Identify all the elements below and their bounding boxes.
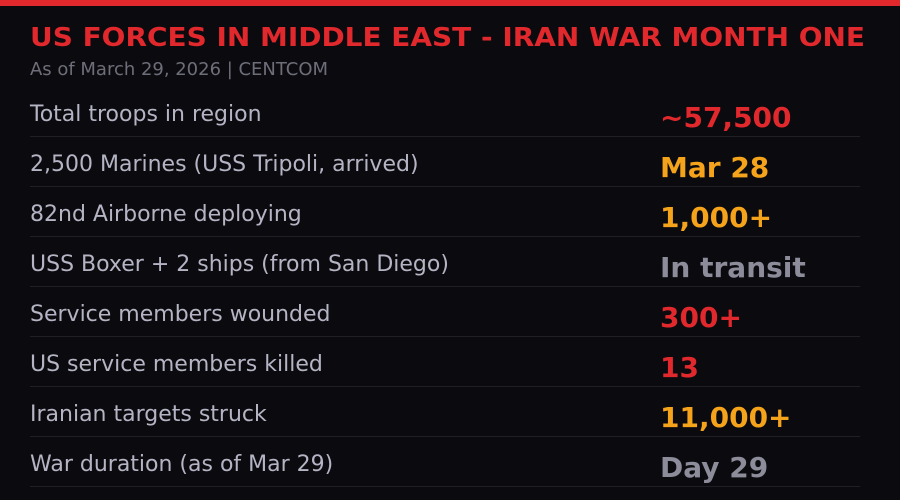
- stats table: 1,000+: [660, 201, 772, 234]
- stats table: [29, 101, 860, 486]
- top accent bar: [0, 0, 900, 6]
- stats table: Day 29: [660, 451, 768, 484]
- stats table: 13: [660, 351, 699, 384]
- stats table: Iranian targets struck: [30, 402, 267, 427]
- stats table: ~57,500: [660, 101, 792, 134]
- title: US FORCES IN MIDDLE EAST - IRAN WAR MONTH ONE: [30, 23, 865, 53]
- stats table: 2,500 Marines (USS Tripoli, arrived): [30, 152, 419, 177]
- stats table: War duration (as of Mar 29): [30, 452, 333, 477]
- stats table: 300+: [660, 301, 742, 334]
- stats table: Total troops in region: [29, 102, 262, 127]
- stats table: US service members killed: [30, 352, 323, 377]
- stats table: Mar 28: [660, 151, 769, 184]
- stats table: USS Boxer + 2 ships (from San Diego): [30, 252, 449, 277]
- stats table: In transit: [660, 251, 806, 284]
- subtitle: As of March 29, 2026 | CENTCOM: [30, 59, 328, 80]
- stats table: 82nd Airborne deploying: [30, 202, 302, 227]
- stats table: 11,000+: [660, 401, 792, 434]
- stats table: Service members wounded: [30, 302, 331, 327]
